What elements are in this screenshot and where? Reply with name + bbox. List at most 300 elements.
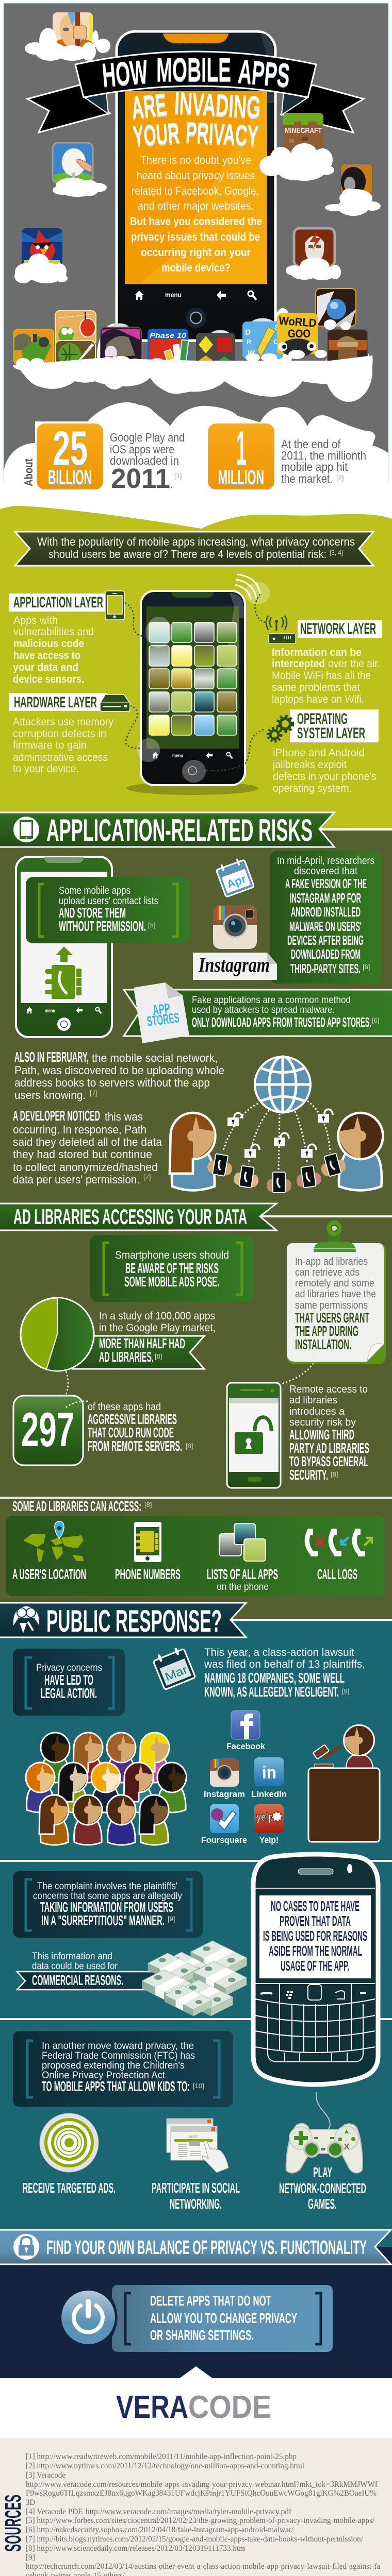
- title lines on the screen: [130, 86, 262, 152]
- top strip: [255, 1888, 375, 1889]
- intro text: mobile device?: [161, 261, 231, 274]
- callout: privacy concerns: HAVE LED TO: [44, 1672, 93, 1688]
- clip: [314, 1220, 356, 1252]
- title lines on the screen: ARE: [130, 87, 168, 125]
- ribbon fold right: [282, 92, 307, 115]
- stat: 25 billion: .: [171, 481, 173, 489]
- description: to your device.: [13, 763, 79, 775]
- text: path discovery: the mobile social network,: [92, 1052, 218, 1064]
- stat: 1 million: 1: [236, 421, 247, 475]
- judge: [308, 1725, 380, 1842]
- stat box: [37, 423, 103, 489]
- sources list: [7] http://bits.blogs.nytimes.com/2012/02/15/google-and-mobile-apps-take-data-books-without-permission/: [26, 2535, 364, 2544]
- section divider line: [315, 828, 392, 831]
- phone shadow: [126, 782, 258, 795]
- sources list: [6] http://nakedsecurity.sophos.com/2012/04/18/fake-instagram-app-android-malwar/: [26, 2526, 294, 2534]
- sources background: [0, 2438, 392, 2576]
- title line 1: [101, 51, 291, 94]
- title lines on the screen: PRIVACY: [185, 115, 259, 152]
- icon: yelp: [254, 1804, 284, 1845]
- page curl: [367, 1344, 384, 1362]
- callout text: Privacy concerns: [36, 1663, 102, 1673]
- icon: browser windows and hand: [167, 2119, 228, 2173]
- header grey background: [4, 3, 388, 482]
- phone body: [16, 857, 112, 1037]
- callout: ftc: proposed extending the Children's: [42, 2060, 185, 2071]
- text: lawsuit: [9]: [342, 1687, 349, 1695]
- instagram paper label: Instagram: [198, 953, 270, 976]
- section banner: ad libraries: [0, 1204, 276, 1230]
- icon: linkedin: LinkedIn: [251, 1789, 287, 1799]
- callout: complaint: TAKING INFORMATION FROM USERS: [40, 1899, 173, 1915]
- text: developer noticed: they had stored but continue: [13, 1148, 152, 1161]
- intro text: But have you considered the: [130, 215, 262, 228]
- divider line: [0, 2018, 392, 2020]
- text: remote access: Remote access to: [289, 1384, 368, 1395]
- text: commercial use: This information and: [32, 1951, 112, 1962]
- description: over the air.: [328, 658, 380, 670]
- title lines on the screen: YOUR: [132, 116, 181, 152]
- olive section background: [0, 829, 392, 1620]
- callout: contact lists: [5]: [148, 921, 155, 929]
- controller cable: [316, 2092, 330, 2129]
- text: remote access: [8]: [331, 1470, 338, 1478]
- heading: HARDWARE LAYER: [14, 694, 97, 711]
- panel: network layer: [266, 616, 382, 705]
- phone highlight: [230, 592, 244, 618]
- intro text: privacy issues that could be: [131, 230, 260, 243]
- description: vulnerabilities and: [13, 626, 94, 638]
- stat: 297: [13, 1396, 89, 1465]
- text: study: in the Google Play market,: [99, 1322, 216, 1334]
- icon: avatar game: [53, 12, 93, 53]
- text: remote access: ad libraries: [289, 1395, 337, 1406]
- description: [272, 647, 380, 705]
- icon: phone circle: [13, 817, 39, 842]
- question ribbon: [15, 532, 373, 566]
- callout: delete apps: [58, 2285, 333, 2352]
- icon: draw something: D: [244, 328, 251, 337]
- brackets: [104, 1243, 242, 1295]
- callout: contact lists: upload users' contact lists: [59, 895, 158, 907]
- callout: ftc: [13, 2031, 233, 2107]
- icon: globe: [255, 1057, 311, 1112]
- description: device sensors.: [13, 673, 84, 685]
- text: developer noticed: data per users' permission.: [13, 1173, 140, 1186]
- nav: home: [26, 1007, 32, 1013]
- divider line: [0, 1497, 392, 1499]
- description: Mobile WiFi has all the: [272, 670, 371, 682]
- clipboard note: same permissions: [295, 1300, 368, 1311]
- icon: linkedin: [251, 1757, 287, 1799]
- icon: train game: [14, 329, 54, 364]
- stat: 1 million: [2]: [336, 474, 344, 482]
- judge head: [344, 1725, 374, 1756]
- description: jailbreaks exploit: [272, 759, 347, 771]
- text: commercial use: [32, 1951, 118, 1972]
- buttons and keyboard: [255, 1984, 375, 2062]
- icon: march calendar: [152, 1645, 195, 1690]
- text: path discovery: ALSO IN FEBRUARY,: [14, 1049, 89, 1065]
- ribbon: more than half: MORE THAN HALF HAD: [99, 1335, 185, 1351]
- icon: drive: [100, 694, 130, 711]
- cloud under shadow gun icon: [286, 258, 341, 280]
- icon: phone with contacts: [134, 1522, 161, 1562]
- nav: home: [135, 291, 144, 300]
- icon: cut the rope: [55, 311, 96, 345]
- callout: delete apps: ALLOW YOU TO CHANGE PRIVACY: [150, 2310, 297, 2326]
- stat: 1 million: [208, 421, 366, 489]
- stat description: At the end of: [281, 437, 341, 451]
- description: corruption defects in: [13, 728, 106, 740]
- callout: contact lists: [26, 877, 189, 943]
- description: laptops have on Wifi.: [272, 693, 364, 705]
- screen sheen: [222, 606, 239, 685]
- note text: In-app ad libraries: [295, 1256, 368, 1267]
- ribbon: commercial reasons: COMMERCIAL REASONS.: [32, 1972, 123, 1988]
- text: 297 description: AGGRESSIVE LIBRARIES: [88, 1411, 177, 1427]
- section banner: application-related risks: [0, 812, 334, 848]
- sources list: http://www.veracode.com/resources/mobile-apps-invading-your-privacy-webinar.html?mkt_tok=3RkMMJWWf: [26, 2480, 378, 2489]
- clipboard note: [287, 1220, 386, 1364]
- text: lawsuit: was filed on behalf of 13 plaintiffs,: [204, 1658, 365, 1670]
- text: lawsuit: [204, 1647, 365, 1700]
- callout: complaint: [13, 1871, 203, 1938]
- callout text: Smartphone users should: [115, 1249, 229, 1261]
- description: defects in your phone's: [273, 771, 377, 783]
- icon: facebook: Facebook: [226, 1741, 266, 1751]
- divider line: [230, 1619, 392, 1621]
- stat: 25 billion: 2011: [111, 463, 170, 494]
- text: developer noticed: occurring. In response, Path: [13, 1123, 146, 1136]
- text: study: [99, 1310, 216, 1334]
- description: firmware to gain: [13, 739, 87, 751]
- labels for kids apps: RECEIVE TARGETED ADS.: [23, 2180, 116, 2196]
- heading: OPERATING: [297, 710, 348, 727]
- sensor dot: [347, 1864, 352, 1873]
- icon: people: [13, 1606, 39, 1633]
- icon: call logs: [307, 1529, 372, 1556]
- nav: menu: menu: [172, 753, 183, 759]
- pie chart: [21, 1298, 94, 1371]
- text: path discovery: Path, was discovered to be uploading whole: [14, 1064, 224, 1077]
- icon: yelp: Yelp!: [259, 1835, 279, 1845]
- blackberry phone: [253, 1854, 378, 2084]
- sources list: [1] http://www.readwriteweb.com/mobile/2011/11/mobile-app-inflection-point-25.php: [26, 2452, 297, 2461]
- panel: can access: on the phone: [217, 1582, 269, 1592]
- stat: 1 million: 2011, the millionth: [281, 449, 366, 462]
- description: Information can be: [272, 647, 362, 658]
- icon: facebook: [226, 1710, 266, 1751]
- white pointer triangle: [179, 2366, 213, 2379]
- dotted links from globe: [223, 1101, 330, 1171]
- label box: [298, 620, 382, 638]
- title line 1: MOBILE: [156, 51, 231, 88]
- icon: world of goo: [277, 313, 318, 357]
- text: developer noticed: [13, 1108, 162, 1186]
- phone speaker: [171, 592, 214, 598]
- callout: ftc: [10]: [193, 2082, 204, 2090]
- stat: 1 million: mobile app hit: [281, 460, 348, 473]
- icon: foursquare: Foursquare: [201, 1835, 247, 1845]
- icon: open lock: [235, 1417, 271, 1454]
- light arcs around icons: [109, 318, 278, 345]
- home button: [57, 1018, 71, 1031]
- stat box: [13, 1396, 83, 1465]
- icon: world of goo: GOO: [288, 327, 311, 340]
- section banner: public response: [0, 1603, 246, 1638]
- icon: shadow gun: [294, 228, 335, 266]
- callout: smartphone users: SOME MOBILE ADS POSE.: [124, 1274, 219, 1290]
- text: developer noticed: to collect anonymized/hashed: [13, 1161, 158, 1174]
- question ribbon: With the popularity of mobile apps increasing, what privacy concerns: [37, 535, 355, 548]
- paper: app stores: STORES: [146, 1010, 180, 1029]
- text: 297 description: THAT COULD RUN CODE: [88, 1425, 174, 1440]
- ribbon text: Fake applications are a common method: [192, 995, 351, 1006]
- handheld phones: [206, 1151, 347, 1193]
- big cloud in front of icon row: [13, 319, 373, 397]
- heading: PUBLIC RESPONSE?: [46, 1604, 222, 1638]
- icon: instagram small: [204, 1758, 245, 1799]
- intro text: occurring right on your: [141, 246, 251, 259]
- icon: fruit ninja: [55, 341, 95, 376]
- icon: game controller: [286, 2092, 363, 2173]
- heading: some ad libraries: SOME AD LIBRARIES CAN ACCESS:: [12, 1498, 141, 1514]
- icon: march calendar: Mar: [163, 1663, 190, 1684]
- icon: browser windows and hand: search: [189, 2135, 198, 2139]
- orange screen: [125, 91, 267, 284]
- icon: tire game: [340, 164, 372, 196]
- dotted accent: [66, 1401, 89, 1408]
- veracode logo: VERA: [116, 2389, 188, 2425]
- icon: world of goo: WoRLD: [279, 314, 317, 330]
- ribbon fold left: [85, 92, 108, 114]
- clipboard note: remotely and some: [295, 1278, 374, 1289]
- intro text: There is no doubt you've: [140, 154, 251, 166]
- callout text: The complaint involves the plaintiffs': [37, 1881, 177, 1892]
- callout: complaint: concerns that some apps are allegedly: [33, 1891, 182, 1902]
- green risk section background: [0, 506, 392, 831]
- icon: target: [40, 2113, 99, 2172]
- icon: upload arrow: [56, 946, 73, 962]
- panel: hardware layer: [9, 693, 130, 775]
- label box: [9, 693, 107, 711]
- description: iPhone and Android: [273, 747, 365, 759]
- ribbon: more than half: [8]: [155, 1352, 162, 1360]
- heading: APPLICATION LAYER: [13, 594, 103, 611]
- lock icons: [227, 1109, 333, 1158]
- sources heading: SOURCES: [1, 2495, 26, 2552]
- icon: phase 10: [148, 329, 188, 365]
- callout text: DELETE APPS THAT DO NOT: [150, 2293, 271, 2309]
- nav: menu: menu: [165, 291, 182, 299]
- screen shine: [140, 91, 267, 284]
- question ribbon: should users be aware of? There are 4 levels of potential risk:: [48, 548, 326, 561]
- stat: 25 billion: downloaded in: [110, 454, 179, 467]
- phone body: [253, 1854, 378, 2084]
- ribbon: trusted app stores: used by attackers to spread malware.: [192, 1005, 335, 1015]
- icon: angry birds space: [22, 228, 62, 266]
- text: remote access: introduces a: [289, 1406, 345, 1417]
- sources list: [9]: [26, 2553, 35, 2562]
- labels for kids apps: PLAY: [313, 2164, 332, 2180]
- panel: can access: PHONE NUMBERS: [115, 1566, 181, 1582]
- callout: fake instagram: [6]: [363, 963, 370, 971]
- icon: draw something: S: [274, 323, 279, 331]
- ribbon tail right: [281, 85, 364, 132]
- text: commercial use: data could be used for: [32, 1961, 118, 1972]
- dotted links: [66, 1354, 319, 1395]
- callout: privacy concerns: LEGAL ACTION.: [41, 1685, 97, 1701]
- sources list: 3D: [26, 2498, 35, 2507]
- back clouds behind the phone: [97, 308, 372, 402]
- navy section background: [0, 2247, 392, 2378]
- panel: operating system layer: [268, 709, 379, 794]
- callout: contact lists: WITHOUT PERMISSION.: [59, 918, 146, 934]
- description: [13, 615, 94, 685]
- judge body: [346, 1754, 373, 1768]
- icon: bejeweled: [196, 333, 235, 367]
- icon: phase 10: Phase 10: [150, 331, 186, 340]
- cloud under angry birds icon: [14, 253, 68, 283]
- controller body: [286, 2124, 363, 2173]
- heading: some ad libraries: [8]: [144, 1501, 152, 1509]
- description: malicious code: [13, 638, 84, 650]
- description: Attackers use memory: [13, 716, 113, 728]
- divider line: [0, 1860, 392, 1862]
- phone screen: [146, 606, 239, 749]
- stat: 25 billion: [22, 421, 185, 494]
- ribbon: trusted app stores: [6]: [372, 1016, 379, 1024]
- callout: delete apps: OR SHARING SETTINGS.: [150, 2327, 254, 2343]
- icon: asphalt: [101, 327, 141, 366]
- callout: smartphone users: BE AWARE OF THE RISKS: [125, 1260, 219, 1276]
- divider line: [258, 1215, 392, 1217]
- text: developer noticed: A DEVELOPER NOTICED: [13, 1108, 100, 1124]
- callout: contact lists: AND STORE THEM: [59, 905, 126, 921]
- desk: [308, 1768, 380, 1842]
- sources list: [3] Veracode: [26, 2471, 66, 2480]
- sources list: [5] http://www.forbes.com/sites/ciocentral/2012/02/23/the-growing-problem-of-privacy-invading-mobile-apps/: [26, 2516, 375, 2525]
- intro text: heard about privacy issues: [137, 169, 255, 182]
- buttons: [338, 2129, 355, 2149]
- text: path discovery: [7]: [90, 1089, 97, 1097]
- backing: [287, 1243, 386, 1364]
- dotted connectors: [125, 594, 265, 771]
- callout: fake instagram: In mid-April, researchers: [277, 855, 374, 867]
- icon: instagram small: Instagram: [204, 1789, 245, 1799]
- question ribbon: [3, 4]: [330, 549, 343, 556]
- icon: yelp: yelp: [256, 1811, 273, 1823]
- sticks: [304, 2137, 342, 2157]
- icon: ball game: [316, 289, 356, 326]
- ribbon: more than half: AD LIBRARIES.: [99, 1349, 154, 1365]
- lower white cloud: [4, 402, 388, 515]
- heading: some ad libraries: [12, 1498, 152, 1514]
- crowd of plaintiffs: [26, 1733, 186, 1845]
- ribbon centre: [75, 52, 316, 97]
- text: remote access: [289, 1384, 369, 1483]
- description: same problems that: [272, 682, 360, 693]
- nav: home: [152, 752, 158, 758]
- callout text: In another move toward privacy, the: [42, 2041, 194, 2052]
- icon: world map with pin: [23, 1521, 84, 1563]
- text: 297 description: FROM REMOTE SERVERS.: [88, 1438, 182, 1454]
- icon: gears: [268, 716, 293, 741]
- text: path discovery: [14, 1049, 224, 1101]
- title lines on the screen: INVADING: [173, 86, 262, 124]
- icon: modern combat: [328, 330, 368, 368]
- item labels: A USER'S LOCATION: [12, 1566, 86, 1582]
- brackets: [125, 2293, 321, 2344]
- stat number: 25: [53, 421, 88, 475]
- stat box: [208, 423, 274, 489]
- phone shine: [260, 33, 274, 103]
- label box: [290, 709, 379, 742]
- dpad: [294, 2131, 308, 2145]
- panel: application layer: [9, 591, 124, 685]
- icon: money stacks: [142, 1941, 247, 2016]
- text: remote access: SECURITY.: [289, 1467, 328, 1483]
- text: 297 description: [8]: [186, 1442, 193, 1450]
- hero phone: [117, 31, 275, 341]
- icon: asphalt: E: [107, 354, 113, 366]
- cloud under avatar icon: [25, 28, 110, 61]
- labels for kids apps: GAMES.: [308, 2196, 337, 2212]
- highlight spots: [137, 582, 270, 783]
- brackets: [27, 2041, 219, 2097]
- description: [13, 716, 113, 775]
- panel: contact phone: [16, 857, 112, 1037]
- callout: ftc: Federal Trade Commission (FTC) has: [42, 2050, 195, 2061]
- callout: ftc: Online Privacy Protection Act: [42, 2070, 166, 2081]
- speaker: [298, 1869, 333, 1874]
- cloud under minecraft icon: [259, 143, 334, 181]
- brackets: [26, 1657, 113, 1708]
- sources list: [2] http://www.nytimes.com/2011/12/12/technology/one-million-apps-and-counting.html: [26, 2462, 305, 2470]
- clipboard note: ad libraries have the: [295, 1289, 376, 1300]
- description: administrative access: [13, 752, 108, 764]
- wifi arcs: [235, 574, 260, 599]
- person: woman: [170, 1113, 215, 1190]
- screen: [259, 1895, 371, 1978]
- stat description: Google Play and: [110, 431, 185, 444]
- nav: back: [206, 752, 213, 758]
- title ribbon: [27, 51, 364, 132]
- panel: can access: [6, 1516, 385, 1596]
- title line 1: APPS: [237, 53, 291, 94]
- description: operating system.: [273, 783, 352, 794]
- icon: linkedin: in: [262, 1763, 276, 1783]
- call button: [260, 1993, 366, 1994]
- icon: draw something: W: [248, 349, 255, 358]
- phone screen: [21, 872, 107, 1003]
- icon: padlock circle: [13, 2234, 39, 2260]
- icon: app squares: [219, 1523, 266, 1561]
- nav: search: [95, 1007, 102, 1013]
- clipboard note: can retrieve ads: [295, 1267, 360, 1278]
- icon: april calendar: Apr: [225, 872, 248, 891]
- callout box: [112, 2285, 333, 2352]
- layers phone: [141, 591, 245, 785]
- nav: search: [248, 291, 256, 300]
- text: 297 description: of these apps had: [88, 1401, 161, 1413]
- gavel: [313, 1744, 340, 1767]
- app grid: [149, 622, 237, 735]
- callout: smartphone users: [90, 1235, 254, 1302]
- stat: 1 million: the market.: [281, 472, 333, 485]
- stat unit: BILLION: [48, 466, 92, 489]
